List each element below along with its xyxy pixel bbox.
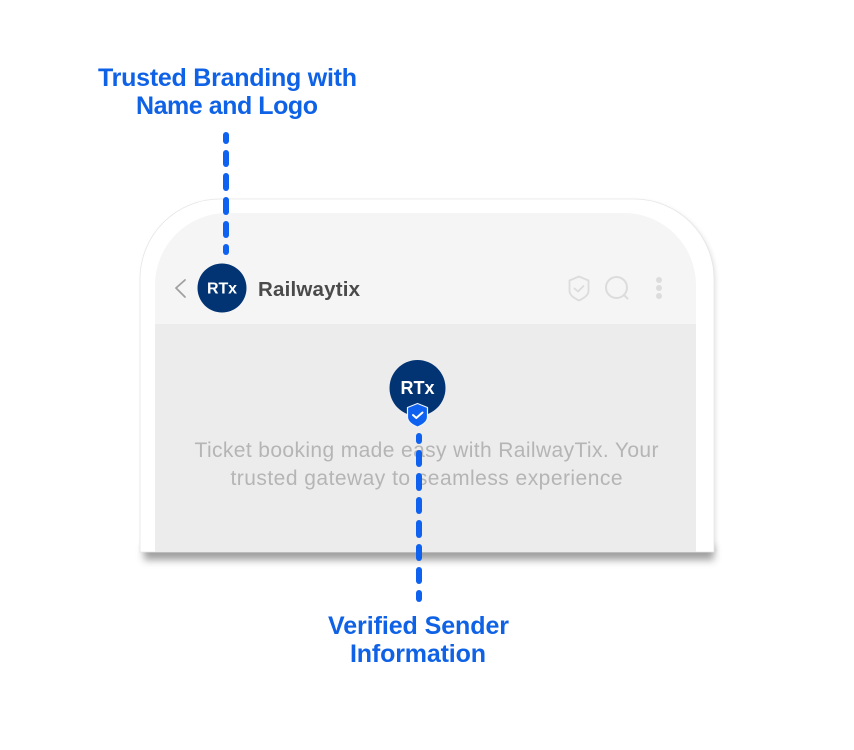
- icon: search: [606, 277, 628, 298]
- icon: header brand logo: RTx: [207, 280, 237, 298]
- icon: profile brand logo: RTx: [400, 378, 434, 398]
- heading: verified sender: Information: [350, 640, 486, 668]
- sender name: Railwaytix: [258, 278, 361, 301]
- heading: verified sender: [328, 612, 509, 668]
- icon: header brand logo: [198, 264, 246, 312]
- heading: trusted branding: Trusted Branding with: [98, 64, 357, 92]
- icon: shield check: [570, 276, 588, 300]
- profile description: Ticket booking made easy with RailwayTix. Your: [194, 439, 658, 462]
- icon: verified badge: [408, 404, 428, 427]
- profile description: [194, 439, 658, 490]
- icon: back chevron: [176, 280, 185, 297]
- heading: trusted branding: Name and Logo: [136, 92, 318, 120]
- icon: more menu: [656, 277, 662, 299]
- profile description: trusted gateway to seamless experience: [230, 467, 622, 490]
- chat header bar: [155, 213, 696, 552]
- arrow: dashed connector to header logo: [223, 135, 229, 252]
- arrow: dashed connector to verified badge: [416, 436, 422, 599]
- icon: profile brand logo: [390, 360, 446, 416]
- heading: trusted branding: [98, 64, 357, 120]
- phone panel: [140, 199, 716, 560]
- heading: verified sender: Verified Sender: [328, 612, 509, 640]
